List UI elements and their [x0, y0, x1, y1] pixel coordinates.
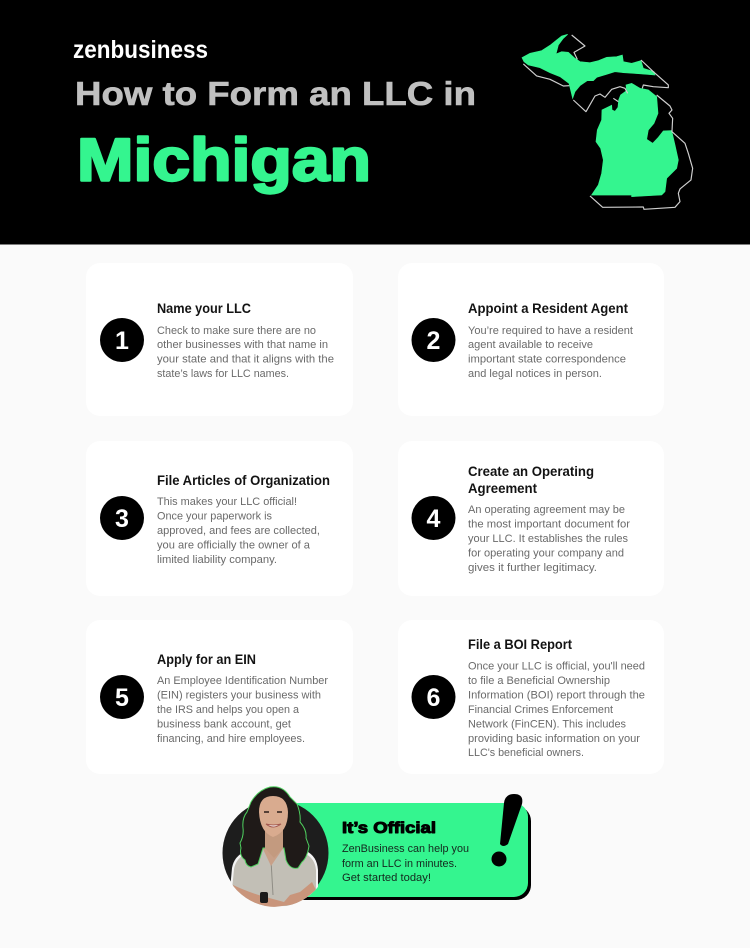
step 6 text: Once your LLC is official, you'll need [468, 660, 645, 672]
step 5 text: financing, and hire employees. [157, 733, 305, 745]
step 4 text: gives it further legitimacy. [468, 562, 597, 574]
step 4 card [398, 441, 664, 596]
step 1 text: Check to make sure there are no [157, 325, 316, 337]
step 1 text: other businesses with that name in [157, 339, 328, 351]
title line 2: Michigan [77, 126, 371, 194]
logo: zenbusiness [73, 36, 208, 64]
title line 1: How to Form an LLC in [75, 75, 476, 112]
step 6 text: Network (FinCEN). This includes [468, 718, 626, 730]
step 3 number: 3 [115, 505, 129, 533]
step 5 text: the IRS and helps you open a [157, 704, 300, 716]
step 1 number: 1 [115, 327, 129, 355]
step 1 heading: Name your LLC [157, 301, 251, 316]
step 2 number: 2 [427, 327, 440, 355]
step 5 card [86, 620, 353, 774]
banner text: Get started today! [342, 872, 431, 884]
step 6 text: Financial Crimes Enforcement [468, 704, 613, 716]
step 6 text [468, 660, 645, 759]
step 4 heading: Create an Operating [468, 464, 594, 479]
step 4 text: your LLC. It establishes the rules [468, 533, 628, 545]
step 3 card [86, 441, 353, 596]
step 1 card [86, 263, 353, 416]
step 6 text: to file a Beneficial Ownership [468, 675, 610, 687]
step 5 text: (EIN) registers your business with [157, 690, 321, 702]
step 6 text: LLC's beneficial owners. [468, 747, 584, 759]
step 5 number [100, 675, 144, 719]
step 4 heading: Agreement [468, 481, 538, 496]
step 2 text: agent available to receive [468, 339, 593, 351]
step 1 text [157, 325, 334, 380]
step 3 text [157, 496, 320, 566]
step 5 text [157, 675, 328, 745]
step 3 text: Once your paperwork is [157, 510, 272, 522]
step 6 card [398, 620, 664, 774]
step 4 text [468, 504, 630, 574]
step 2 text: and legal notices in person. [468, 368, 602, 380]
step 3 number [100, 496, 144, 540]
header band [0, 0, 750, 244]
step 3 text: limited liability company. [157, 554, 277, 566]
step 3 text: This makes your LLC official! [157, 496, 297, 508]
step 4 text: An operating agreement may be [468, 504, 625, 516]
banner text: form an LLC in minutes. [342, 858, 457, 870]
portrait photo [222, 787, 328, 908]
step 2 text: You’re required to have a resident [468, 325, 633, 337]
call to action banner [285, 794, 531, 900]
step 5 heading: Apply for an EIN [157, 652, 256, 667]
step 1 text: state’s laws for LLC names. [157, 368, 289, 380]
step 5 number: 5 [115, 684, 129, 712]
step 4 number [412, 496, 456, 540]
step 5 text: business bank account, get [157, 718, 291, 730]
step 1 number [100, 318, 144, 362]
step 6 heading: File a BOI Report [468, 637, 573, 652]
neck and face [265, 830, 283, 858]
banner text: ZenBusiness can help you [342, 843, 469, 855]
step 2 number [412, 318, 456, 362]
step 6 text: providing basic information on your [468, 733, 640, 745]
step 6 number: 6 [427, 684, 440, 712]
step 6 text: Information (BOI) report through the [468, 690, 645, 702]
step 4 heading [468, 464, 594, 496]
icon: exclamation mark [492, 794, 522, 866]
step 2 card [398, 263, 664, 416]
step 4 text: the most important document for [468, 518, 630, 530]
step 3 heading: File Articles of Organization [157, 473, 330, 488]
step 2 heading: Appoint a Resident Agent [468, 301, 629, 316]
step 4 number: 4 [427, 505, 441, 533]
banner text [342, 843, 469, 884]
step 4 text: for operating your company and [468, 548, 624, 560]
step 6 number [412, 675, 456, 719]
step 3 text: you are officially the owner of a [157, 540, 311, 552]
step 2 text: important state correspondence [468, 354, 626, 366]
crossed arms [233, 882, 316, 908]
step 5 text: An Employee Identification Number [157, 675, 328, 687]
step 2 text [468, 325, 633, 380]
banner heading: It’s Official [342, 820, 436, 837]
hair [240, 787, 309, 868]
step 1 text: your state and that it aligns with the [157, 354, 334, 366]
shirt [230, 852, 318, 900]
map of Michigan [522, 34, 693, 209]
step 3 text: approved, and fees are collected, [157, 525, 320, 537]
